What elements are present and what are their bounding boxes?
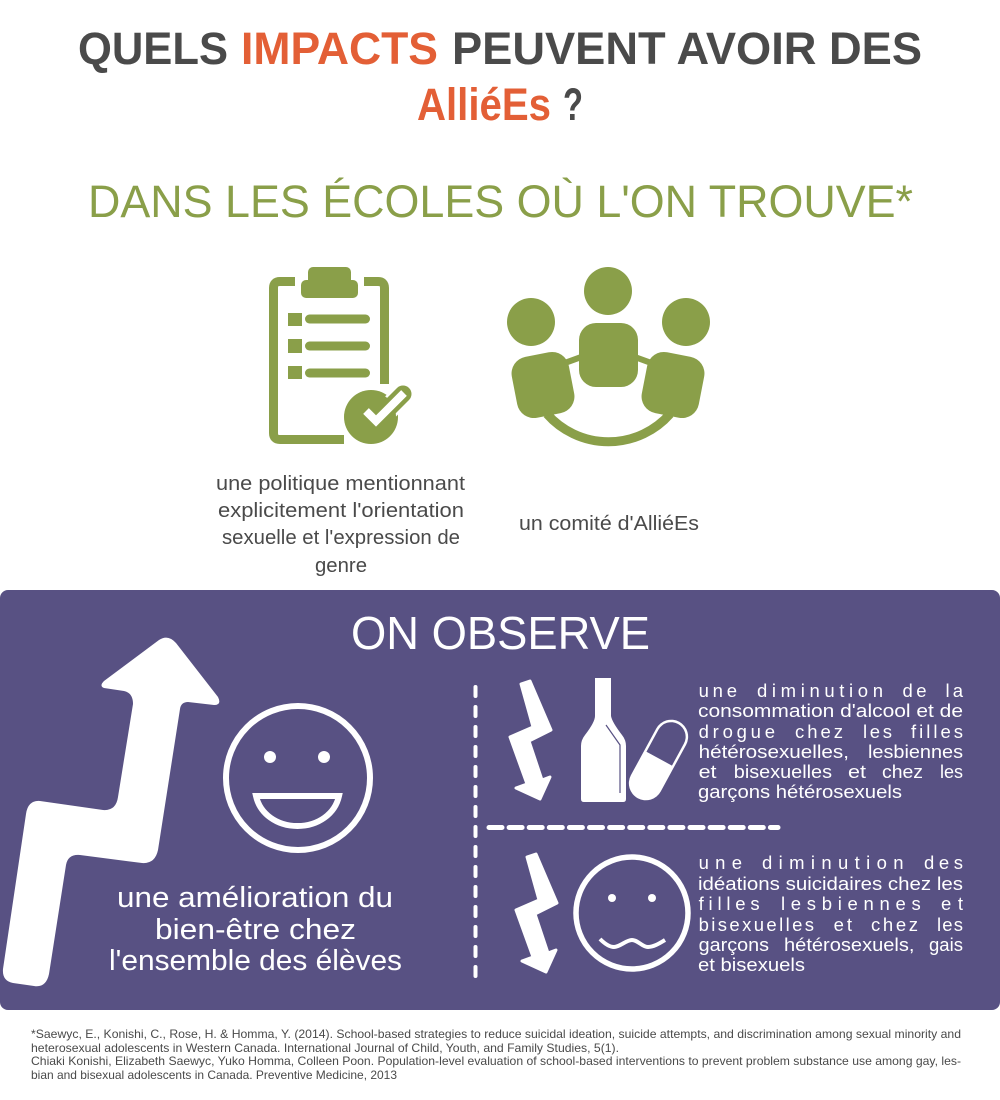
text: wellbeing improvement: bien-être chez (155, 914, 356, 946)
icon: zigzag down arrow (suicidal ideation) (516, 854, 557, 972)
text: school policy: genre (315, 555, 367, 577)
text: reduced alcohol and drug use: diminution (757, 680, 883, 701)
icon: zigzag down arrow (substances) (510, 681, 551, 799)
text: school policy: une politique mentionnant (216, 473, 465, 495)
text: reduced suicidal ideation: garçons (699, 934, 769, 955)
dashed dividers (476, 687, 778, 978)
text: reduced suicidal ideation: et (834, 914, 852, 935)
text: reduced suicidal ideation: les (937, 914, 963, 935)
title: PEUVENT AVOIR DES (452, 23, 922, 74)
text: reduced alcohol and drug use: une (699, 680, 737, 701)
panel: on observe (0, 590, 1000, 1010)
text: wellbeing improvement (109, 882, 402, 977)
text: reduced suicidal ideation: gais (929, 934, 963, 955)
text: reduced alcohol and drug use: lesbiennes (868, 741, 963, 762)
text: reduced alcohol and drug use: consommation d'alcool et de (698, 700, 963, 721)
icon: zigzag up arrow (3, 638, 219, 986)
text: school policy: explicitement l'orientation (218, 500, 464, 522)
text: reduced alcohol and drug use: filles (911, 721, 963, 742)
text: school policy (216, 473, 465, 577)
text: wellbeing improvement: une amélioration du (117, 882, 393, 914)
text: reduced alcohol and drug use: et (848, 761, 866, 782)
icon: pill (623, 714, 694, 806)
footnote references (31, 1027, 961, 1082)
text: reduced alcohol and drug use: les (863, 721, 892, 742)
text: reduced suicidal ideation: filles (699, 893, 760, 914)
panel heading: ON OBSERVE (351, 607, 650, 659)
text: reduced alcohol and drug use: drogue (699, 721, 775, 742)
icon: clipboard with check mark (274, 267, 404, 449)
icon: bottle (581, 678, 626, 802)
footnote references: heterosexual adolescents in Western Canada. International Journal of Child, Youth, and Family Studies, 5(1). (31, 1041, 619, 1055)
footnote references: Chiaki Konishi, Elizabeth Saewyc, Yuko Homma, Colleen Poon. Population-level evaluation of school-based interventions to prevent problem substance use among gay, les- (31, 1054, 961, 1068)
text: reduced suicidal ideation: bisexuelles (699, 914, 814, 935)
text: reduced suicidal ideation: hétérosexuels, (784, 934, 914, 955)
text: reduced suicidal ideation: une (699, 852, 742, 873)
text: reduced alcohol and drug use: bisexuelles (734, 761, 832, 782)
text: reduced suicidal ideation (698, 852, 963, 975)
text: reduced alcohol and drug use: chez (882, 761, 923, 782)
icon: happy face (226, 706, 370, 850)
text: reduced alcohol and drug use: chez (795, 721, 843, 742)
text: reduced suicidal ideation: chez (871, 914, 918, 935)
text: reduced suicidal ideation: et (941, 893, 963, 914)
icon: worried face (576, 857, 688, 969)
title: ? (563, 79, 583, 130)
text: reduced suicidal ideation: diminution (762, 852, 904, 873)
title: AlliéEs (417, 79, 551, 130)
text: reduced alcohol and drug use (698, 680, 964, 802)
text: reduced alcohol and drug use: de (902, 680, 926, 701)
text: reduced alcohol and drug use: garçons hétérosexuels (698, 781, 902, 802)
title: IMPACTS (241, 23, 438, 74)
text: wellbeing improvement: l'ensemble des élèves (109, 945, 402, 977)
text: reduced alcohol and drug use: hétérosexuelles, (699, 741, 849, 762)
text: reduced alcohol and drug use: les (940, 761, 963, 782)
subtitle: DANS LES ÉCOLES OÙ L'ON TROUVE* (88, 176, 913, 227)
text: school policy: sexuelle et l'expression de (222, 527, 460, 549)
title: QUELS (78, 23, 228, 74)
text: reduced suicidal ideation: et bisexuels (698, 954, 805, 975)
text: reduced suicidal ideation: idéations suicidaires chez les (698, 873, 963, 894)
text: reduced alcohol and drug use: la (946, 680, 964, 701)
title (78, 23, 922, 130)
text: reduced suicidal ideation: lesbiennes (781, 893, 921, 914)
footnote references: *Saewyc, E., Konishi, C., Rose, H. & Homma, Y. (2014). School-based strategies to reduce suicidal ideation, suicide attempts, and discrimination among sexual minority and (31, 1027, 961, 1041)
text: reduced suicidal ideation: des (924, 852, 963, 873)
icon: group of people (507, 267, 710, 442)
text: allies committee: un comité d'AlliéEs (519, 513, 699, 535)
footnote references: bian and bisexual adolescents in Canada. Preventive Medicine, 2013 (31, 1068, 397, 1082)
text: reduced alcohol and drug use: et (699, 761, 716, 782)
